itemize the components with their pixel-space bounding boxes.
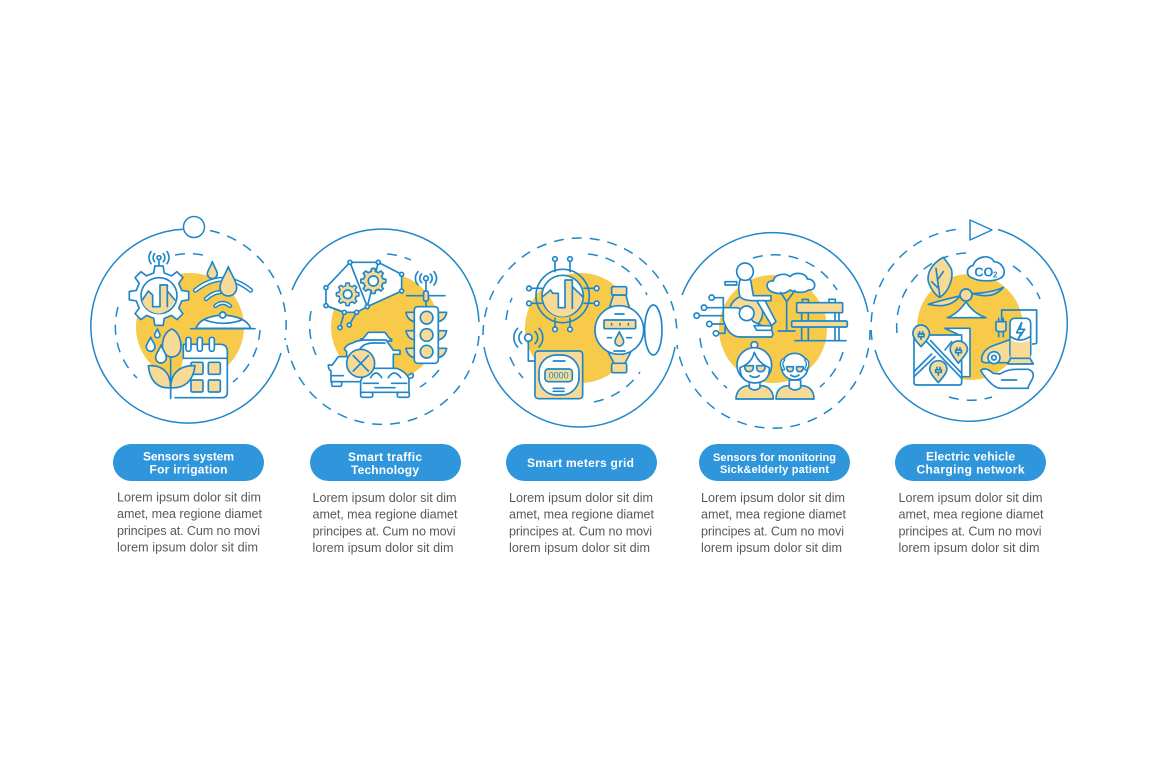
label pill: sensors system: For irrigation (150, 462, 228, 476)
label pill: sensors system (113, 444, 264, 481)
icon: EV charging (913, 257, 1037, 388)
panel: sensors for monitoring sick and elderly patient (677, 233, 870, 428)
label pill: sensors for monitoring: Sensors for monitoring (713, 452, 836, 464)
label pill: smart traffic: Technology (351, 463, 419, 477)
text block: column 5 (898, 491, 1044, 555)
icon: map with pins (913, 325, 970, 385)
text block: column 5: lorem ipsum dolor sit dim (898, 541, 1040, 555)
icon: smart traffic (324, 260, 447, 397)
icon: water meter (595, 287, 662, 373)
icon: gear network (324, 260, 404, 330)
text block: column 1: principes at. Cum no movi (117, 524, 260, 538)
label pill: smart meters: Smart meters grid (527, 456, 634, 470)
icon: gear with chart (129, 252, 189, 325)
icon: electricity meter: 0000 (549, 371, 569, 381)
text block: column 1: amet, mea regione diamet (117, 507, 262, 521)
text block: column 1 (117, 490, 262, 554)
text block: column 3: lorem ipsum dolor sit dim (509, 541, 650, 555)
icon: irrigation sensors (129, 252, 255, 398)
text block: column 3: amet, mea regione diamet (509, 508, 654, 522)
text block: column 2: amet, mea regione diamet (312, 508, 458, 522)
text block: column 1: lorem ipsum dolor sit dim (117, 540, 258, 554)
icon: calendar (175, 337, 227, 398)
icon: elderly woman (736, 342, 773, 399)
icon: city chip (527, 257, 599, 332)
icon: open hand (981, 369, 1033, 388)
icon: cars in jam (328, 332, 413, 397)
marker: start circle (184, 216, 204, 238)
icon: electricity meter (514, 328, 583, 399)
icon: CO2 cloud (967, 257, 1004, 281)
panel: smart meters grid (483, 238, 677, 427)
text block: column 3: principes at. Cum no movi (509, 524, 652, 538)
label pill: smart traffic: Smart traffic (348, 450, 422, 464)
label pill: electric vehicle (895, 444, 1046, 481)
text block: column 2 (312, 491, 458, 555)
label pill: electric vehicle: Electric vehicle (926, 450, 1015, 464)
yellow disc (917, 274, 1023, 380)
icon: soil sensor dome (191, 312, 255, 329)
text block: column 4: principes at. Cum no movi (701, 524, 844, 538)
ring: step 4 (677, 233, 870, 428)
icon: tree (767, 273, 815, 331)
label pill: smart meters (506, 444, 657, 481)
yellow disc (331, 273, 439, 381)
icon: smart meters (514, 257, 662, 399)
label pill: electric vehicle: Charging network (916, 462, 1025, 476)
label pill: sensors for monitoring: Sick&elderly patient (720, 464, 829, 476)
text block: column 3: Lorem ipsum dolor sit dim (509, 491, 653, 505)
panel: smart traffic technology (287, 229, 479, 424)
icon: wheelchair patient on hand (694, 263, 776, 337)
icon: sprinkler drops (195, 262, 251, 306)
ring: step 3 (483, 238, 677, 427)
text block: column 5: amet, mea regione diamet (898, 508, 1044, 522)
icon: bench (792, 299, 847, 341)
label pill: sensors for monitoring (699, 444, 850, 481)
panel: electric vehicle charging network (871, 220, 1067, 421)
yellow disc (525, 273, 635, 383)
icon: CO2 cloud: CO (974, 265, 993, 279)
text block: column 4: lorem ipsum dolor sit dim (701, 541, 842, 555)
icon: elderly man (776, 353, 814, 399)
arrow: end triangle (970, 220, 992, 240)
label pill: smart traffic (310, 444, 461, 481)
text block: column 4 (701, 491, 846, 555)
text block: column 2: Lorem ipsum dolor sit dim (312, 491, 456, 505)
yellow disc (719, 275, 827, 383)
text block: column 2: principes at. Cum no movi (312, 524, 456, 538)
ring: step 5 (871, 229, 1067, 421)
text block: column 1: Lorem ipsum dolor sit dim (117, 490, 261, 504)
icon: balance scale (928, 287, 1003, 318)
text block: column 5: Lorem ipsum dolor sit dim (898, 491, 1042, 505)
text block: column 5: principes at. Cum no movi (898, 524, 1042, 538)
text block: column 3 (509, 491, 654, 555)
label pill: sensors system: Sensors system (143, 450, 234, 464)
icon: traffic light (406, 272, 447, 363)
text block: column 4: Lorem ipsum dolor sit dim (701, 491, 845, 505)
text block: column 2: lorem ipsum dolor sit dim (312, 541, 454, 555)
ring: step 2 (287, 229, 479, 424)
icon: CO2 cloud: 2 (993, 271, 998, 280)
text block: column 4: amet, mea regione diamet (701, 508, 846, 522)
icon: plant with drops (146, 329, 195, 398)
icon: leaf (928, 257, 952, 297)
ring: step 1 (91, 229, 286, 423)
yellow disc (136, 273, 244, 381)
panel: sensors system for irrigation (91, 216, 286, 423)
icon: monitoring patients (694, 263, 847, 399)
icon: charging station and car (982, 310, 1037, 364)
